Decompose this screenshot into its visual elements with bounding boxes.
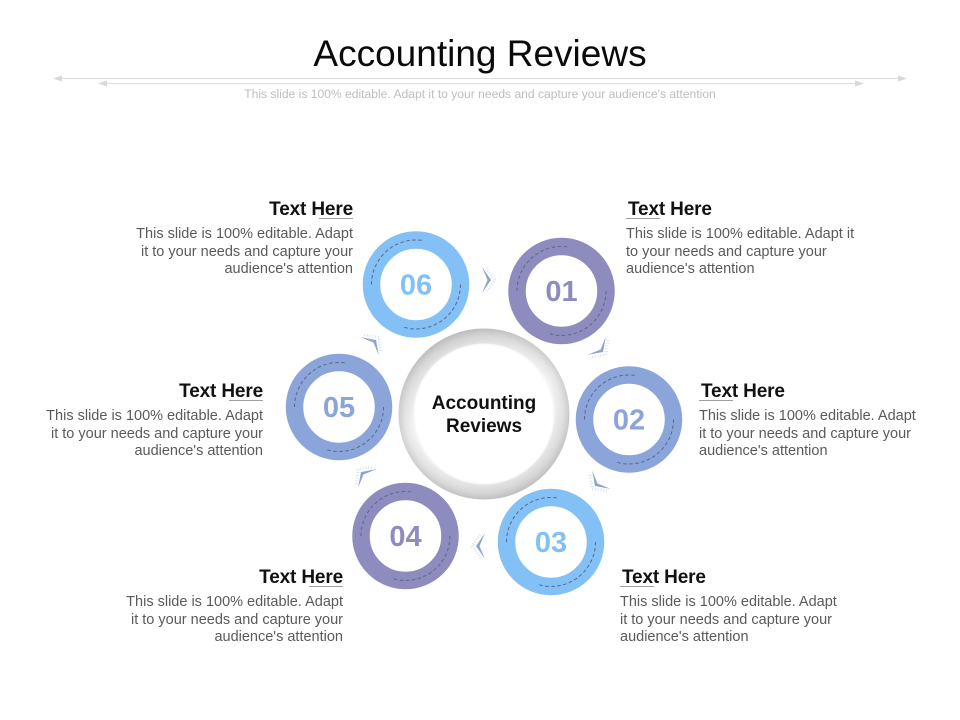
text block 02 — [699, 381, 916, 459]
text block 03: Text Here — [622, 567, 706, 588]
text block 03 — [620, 567, 837, 645]
text block 01: This slide is 100% editable. Adapt it — [626, 226, 854, 242]
text block 04 — [126, 567, 343, 645]
text block 04: This slide is 100% editable. Adapt — [126, 594, 343, 610]
text block 02: audience's attention — [699, 443, 828, 459]
text block 06: This slide is 100% editable. Adapt — [136, 226, 353, 242]
ring 06: 06 — [400, 270, 432, 302]
ring 02 — [584, 375, 674, 464]
ring 02: 02 — [613, 404, 645, 436]
arrow 01 to 02 — [587, 336, 615, 364]
text block 06: Text Here — [269, 199, 353, 220]
text block 03: audience's attention — [620, 629, 749, 645]
arrow 06 to 01 — [482, 267, 495, 293]
text block 02: it to your needs and capture your — [699, 426, 911, 442]
ring 05: 05 — [323, 392, 355, 424]
ring 03 — [506, 497, 596, 586]
text block 05: Text Here — [179, 381, 263, 402]
arrow 02 to 03 — [583, 470, 611, 498]
arrow 05 to 06 — [360, 328, 388, 356]
text block 01: to your needs and capture your — [626, 244, 827, 260]
arrow 04 to 05 — [349, 460, 377, 488]
text block 06: audience's attention — [224, 261, 353, 277]
arrow 03 to 04 — [472, 533, 485, 559]
center circle: Reviews — [446, 416, 522, 437]
title: Accounting Reviews — [313, 33, 647, 74]
ring 04: 04 — [389, 521, 422, 553]
ring 05 — [294, 362, 384, 452]
text block 04: it to your needs and capture your — [131, 612, 343, 628]
ring 04 — [361, 491, 450, 580]
text block 05 — [46, 381, 263, 459]
text block 03: This slide is 100% editable. Adapt — [620, 594, 837, 610]
ring 01 — [517, 246, 606, 336]
text block 05: it to your needs and capture your — [51, 426, 263, 442]
text block 02: Text Here — [701, 381, 785, 402]
title divider arrows — [54, 76, 906, 86]
text block 02: This slide is 100% editable. Adapt — [699, 408, 916, 424]
text block 06: it to your needs and capture your — [141, 244, 353, 260]
text block 04: Text Here — [259, 567, 343, 588]
center circle: Accounting — [432, 393, 536, 414]
ring 03: 03 — [535, 527, 567, 559]
text block 03: it to your needs and capture your — [620, 612, 832, 628]
ring 06 — [372, 240, 460, 329]
text block 01: audience's attention — [626, 261, 755, 277]
text block 01 — [626, 199, 854, 277]
text block 04: audience's attention — [214, 629, 343, 645]
subtitle: This slide is 100% editable. Adapt it to your needs and capture your audience's attention — [244, 87, 716, 101]
center circle — [398, 328, 570, 500]
text block 01: Text Here — [628, 199, 712, 220]
text block 05: This slide is 100% editable. Adapt — [46, 408, 263, 424]
text block 06 — [136, 199, 353, 277]
text block 05: audience's attention — [134, 443, 263, 459]
ring 01: 01 — [545, 276, 578, 308]
